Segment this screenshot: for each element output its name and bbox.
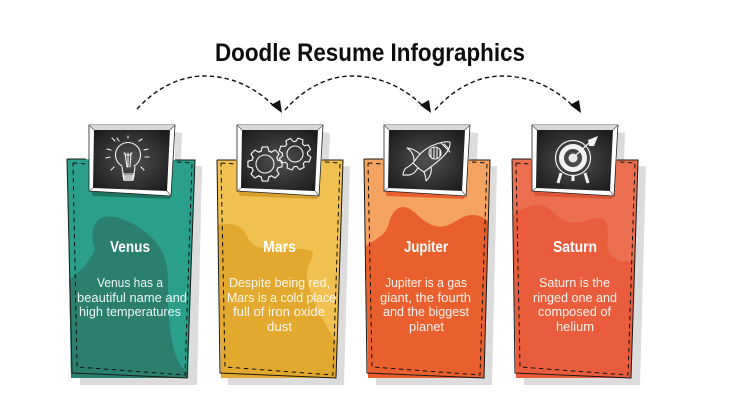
body text: and the biggest <box>383 305 470 319</box>
icon: target <box>556 136 598 183</box>
chalkboard frame <box>532 125 618 196</box>
body text: dust <box>267 320 293 334</box>
body text: Despite being red, <box>229 276 330 290</box>
chalkboard frame <box>89 125 175 196</box>
arrow: Jupiter to Saturn <box>435 76 581 113</box>
body text: composed of <box>538 305 612 319</box>
icon: rocket <box>403 142 450 181</box>
chalkboard frame <box>384 125 470 196</box>
body text <box>533 276 617 334</box>
body text: full of iron oxide <box>233 305 325 319</box>
chalkboard frame <box>237 125 323 196</box>
body text <box>227 276 336 334</box>
body text: planet <box>409 320 445 334</box>
panel: Mars <box>210 125 350 385</box>
body text: Venus has a <box>97 276 163 290</box>
heading: Venus <box>110 239 150 256</box>
arrow: Mars to Jupiter <box>285 76 431 113</box>
panel: Saturn <box>505 125 646 385</box>
body text: beautiful name and <box>77 291 187 305</box>
arrow: Venus to Mars <box>137 76 282 113</box>
title: Doodle Resume Infographics <box>215 39 525 67</box>
body text: high temperatures <box>79 305 181 319</box>
panel: Jupiter <box>360 125 497 385</box>
body text: ringed one and <box>533 291 617 305</box>
icon: gears <box>248 134 315 181</box>
heading: Mars <box>263 239 296 256</box>
body text: Mars is a cold place <box>227 291 336 305</box>
body text: Saturn is the <box>539 276 610 290</box>
body text <box>77 276 187 319</box>
body text: helium <box>556 320 594 334</box>
panel: Venus <box>60 125 202 385</box>
body text: Jupiter is a gas <box>385 276 467 290</box>
heading: Saturn <box>553 239 597 256</box>
body text: giant, the fourth <box>380 291 471 305</box>
heading: Jupiter <box>404 239 448 256</box>
body text <box>380 276 471 334</box>
icon: light bulb <box>106 136 149 180</box>
